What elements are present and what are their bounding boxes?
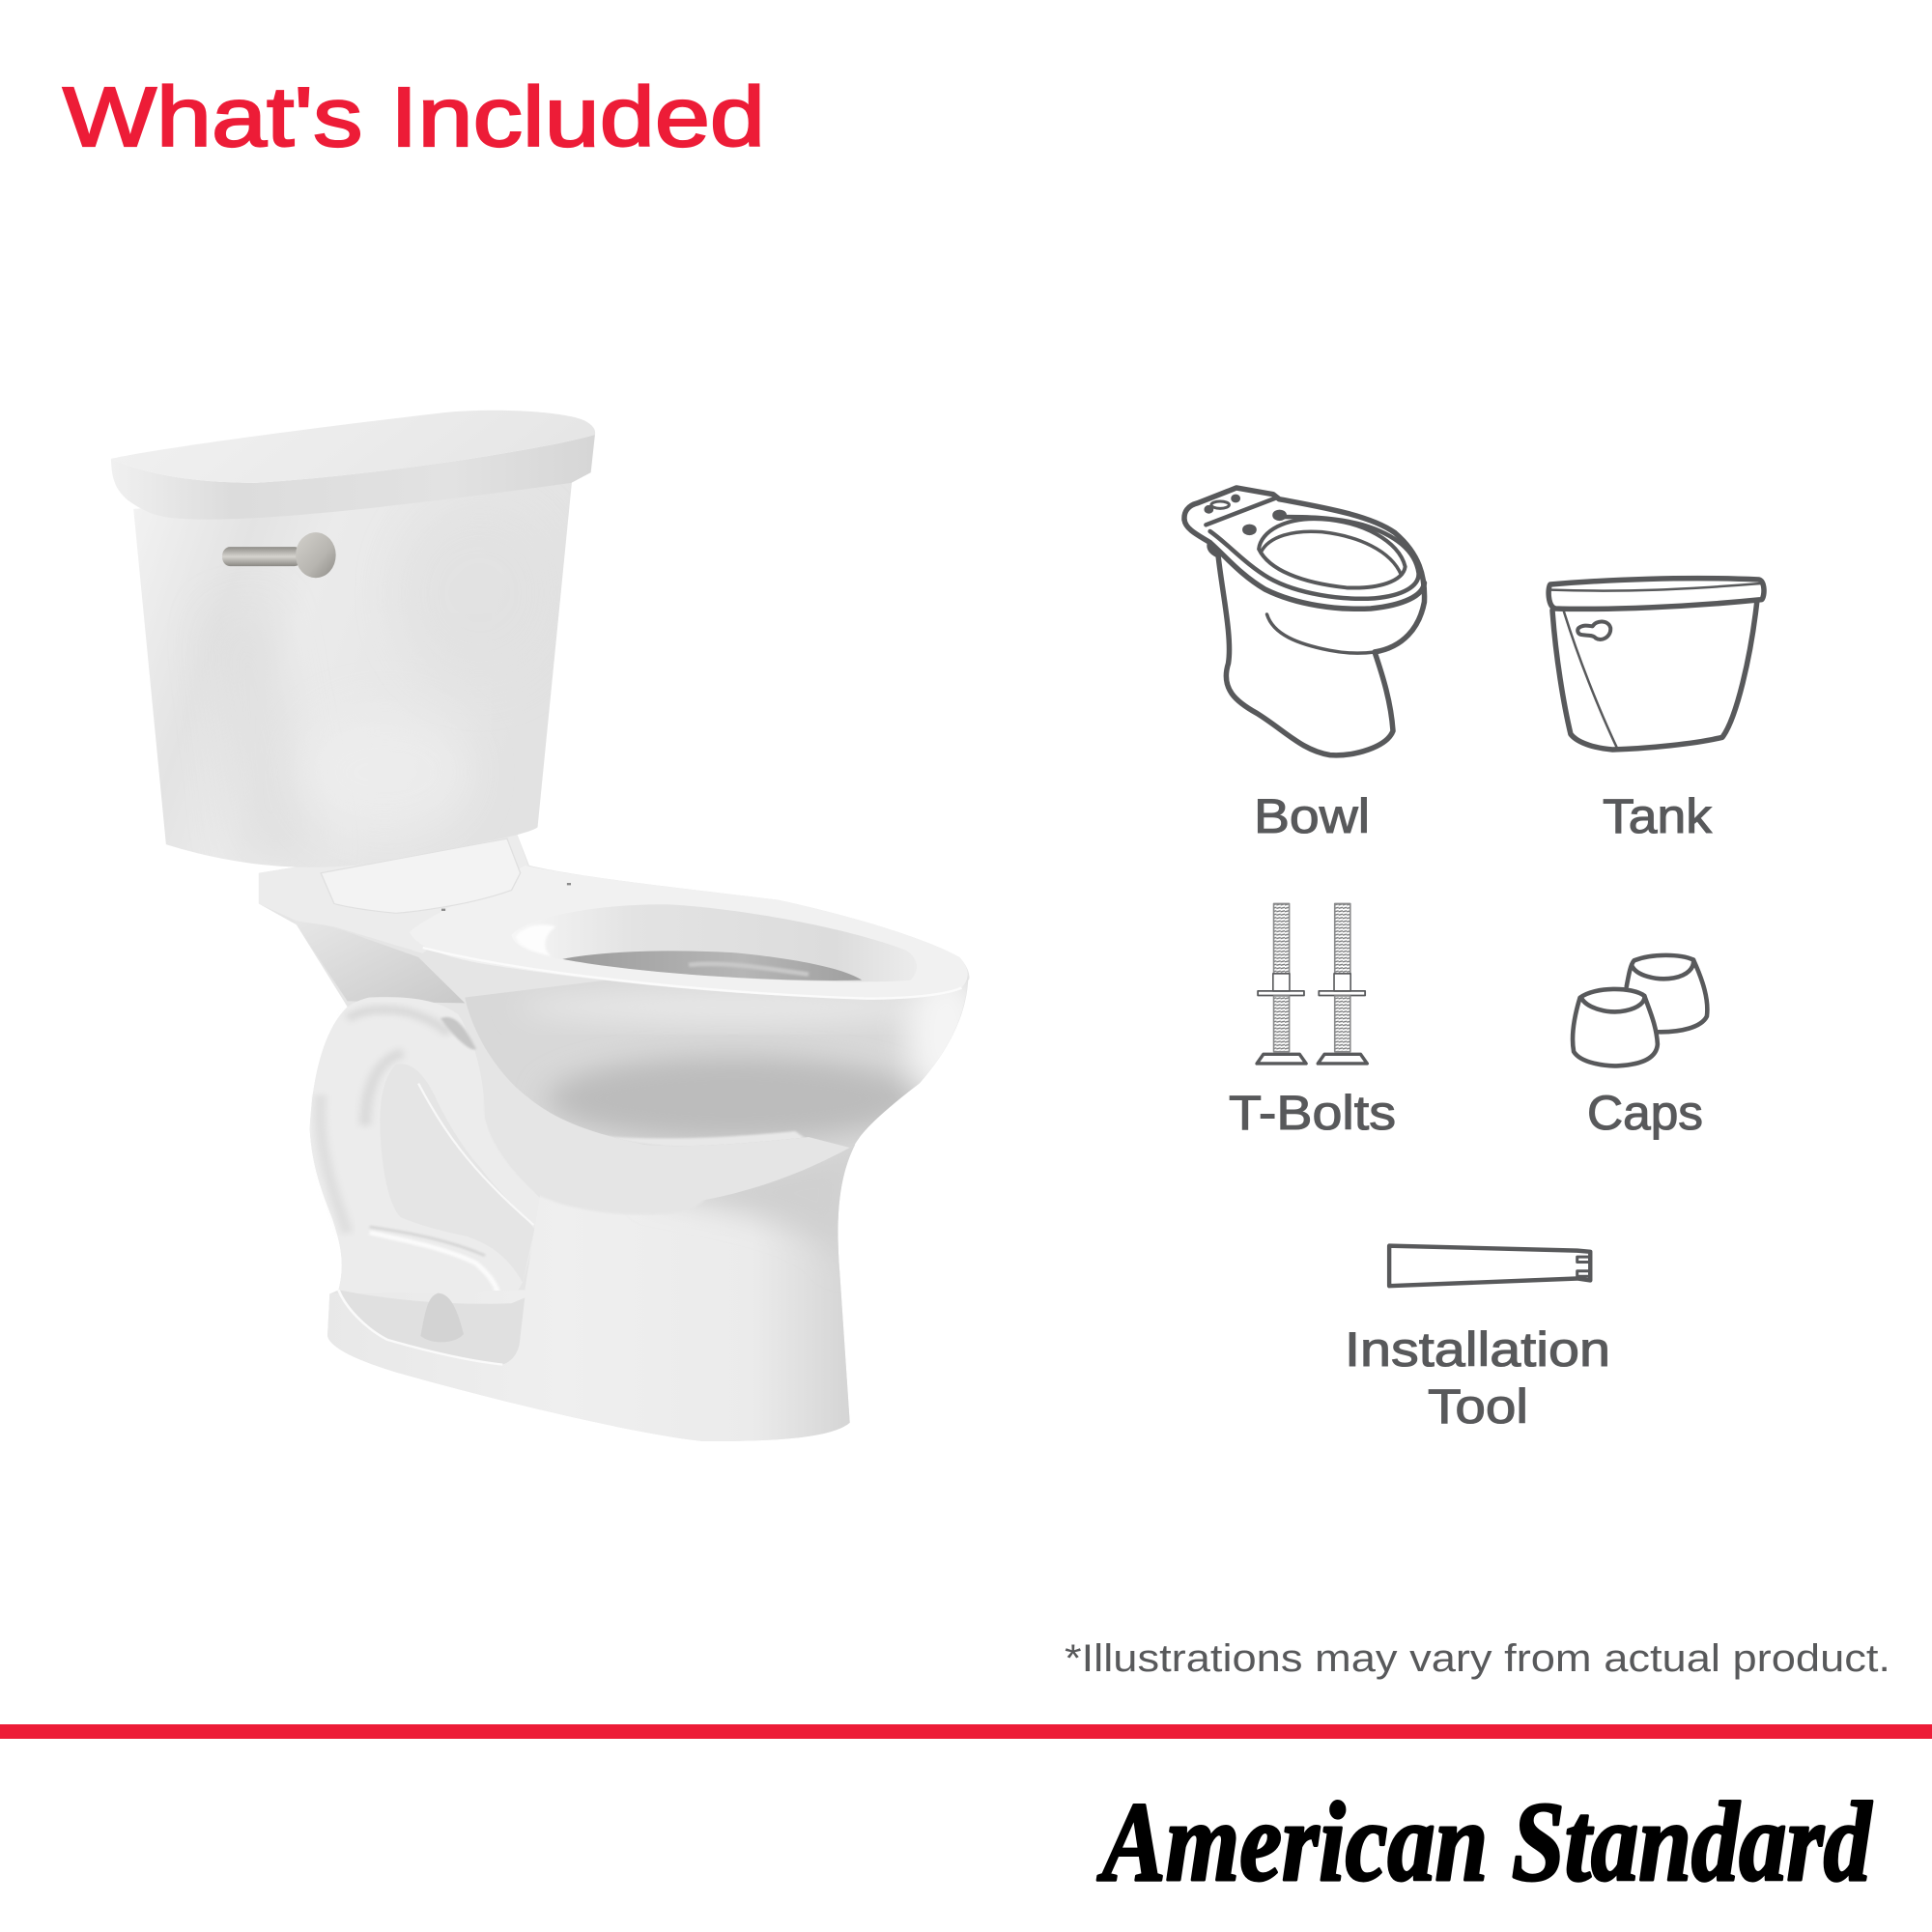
icon: caps bbox=[1573, 955, 1707, 1065]
flush lever bbox=[222, 547, 302, 566]
label: Tank: Tank bbox=[1603, 789, 1713, 843]
rim bbox=[410, 866, 968, 998]
neck under deck bbox=[290, 915, 465, 1003]
icon: t-bolts bbox=[1257, 903, 1367, 1064]
footnote: *Illustrations may vary from actual product. bbox=[1065, 1637, 1890, 1680]
toilet upper: tank bbox=[111, 411, 595, 867]
water bbox=[562, 951, 862, 980]
tube inner edge shading bbox=[365, 1053, 403, 1125]
label: Installation Tool: Tool bbox=[1428, 1379, 1528, 1434]
trapway tube bbox=[310, 997, 543, 1305]
bowl right highlight bbox=[899, 977, 968, 1087]
label: Caps: Caps bbox=[1587, 1086, 1703, 1140]
tank side facet shading bbox=[247, 695, 280, 819]
tube top shading bbox=[348, 1009, 449, 1034]
collar of tube merging into pedestal bbox=[484, 1094, 713, 1214]
bowl opening bbox=[512, 904, 917, 981]
label: Installation Tool bbox=[1345, 1322, 1610, 1434]
base recess bbox=[338, 1290, 525, 1365]
toilet photo bbox=[111, 411, 986, 1447]
tank lower light bbox=[297, 710, 473, 834]
label: T-Bolts: T-Bolts bbox=[1229, 1086, 1396, 1140]
rear flange bbox=[259, 831, 529, 953]
parts list bbox=[1184, 488, 1764, 1434]
bowl base tone bbox=[466, 977, 968, 1148]
bowl bottom reflection bbox=[611, 1130, 805, 1146]
bowl light under rim bbox=[562, 992, 894, 1022]
floor bolt cap bbox=[420, 1293, 464, 1342]
tube outer shading bbox=[320, 1094, 348, 1233]
icon: tank bbox=[1548, 579, 1764, 750]
opening gloss bbox=[516, 924, 555, 956]
lower silhouette bbox=[259, 831, 969, 1441]
bowl body bbox=[466, 980, 965, 1148]
deck plate bbox=[321, 838, 521, 913]
inner recess bbox=[380, 1064, 534, 1282]
title: What's Included bbox=[63, 71, 765, 164]
label: Installation Tool: Installation bbox=[1345, 1322, 1610, 1377]
tank lid front band bbox=[111, 435, 595, 520]
tank lid top surface bbox=[111, 411, 595, 483]
icon: installation tool bbox=[1389, 1246, 1590, 1286]
lower tube gloss bbox=[370, 1233, 498, 1297]
rim lower edge bbox=[423, 948, 961, 999]
water swirl bbox=[689, 964, 809, 975]
bowl shadow bbox=[547, 1057, 920, 1141]
label: Bowl: Bowl bbox=[1254, 789, 1370, 843]
bolt holes bbox=[441, 884, 571, 910]
lower tube gloss shade bbox=[370, 1227, 485, 1256]
toilet lower: bowl and pedestal bbox=[259, 831, 986, 1447]
pedestal base fill bbox=[495, 1145, 855, 1437]
recess rim highlight bbox=[338, 1290, 502, 1365]
pedestal bbox=[495, 1145, 855, 1437]
red divider bar bbox=[0, 1724, 1932, 1739]
recess highlight line bbox=[418, 1084, 533, 1225]
icon: bowl bbox=[1184, 488, 1425, 755]
tank upper-right shade bbox=[397, 503, 562, 683]
flush knob bbox=[296, 532, 336, 578]
trap gloss bbox=[440, 1017, 476, 1050]
pedestal shoulder shading bbox=[692, 1163, 846, 1235]
toilet tank body bbox=[133, 481, 572, 867]
